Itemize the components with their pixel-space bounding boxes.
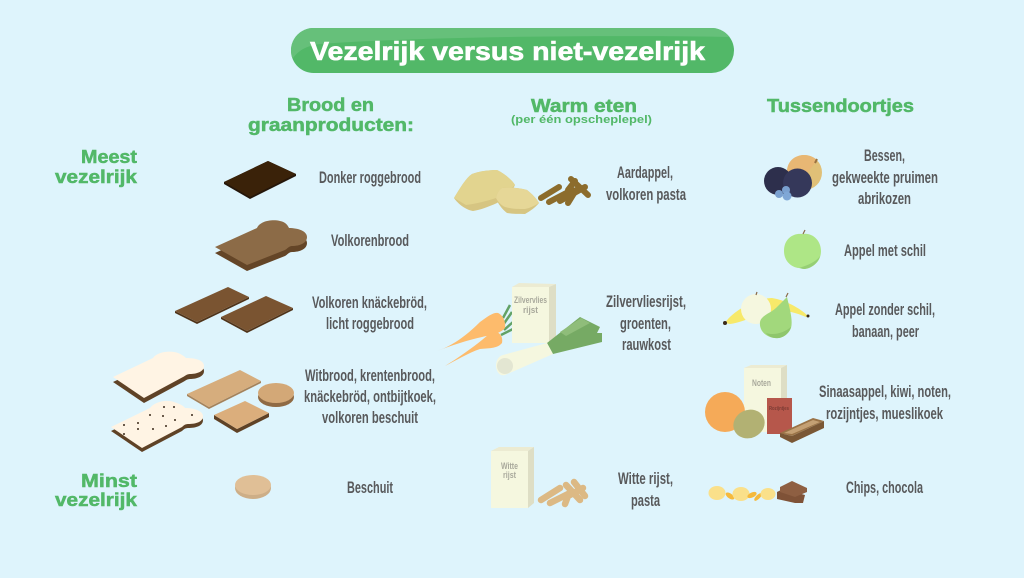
text: appel zonder schil, banaan, peer: banaan, peer <box>852 322 919 341</box>
title banner: Vezelrijk versus niet-vezelrijk <box>310 36 706 66</box>
text: zilvervliesrijst, groenten, rauwkost: rauwkost <box>622 335 671 354</box>
text: bessen, gekweekte pruimen, abrikozen: Bessen, <box>864 146 905 165</box>
label: minst vezelrijk <box>55 471 138 510</box>
heading: tussendoortjes: Tussendoortjes <box>767 96 914 116</box>
title banner <box>291 28 734 73</box>
heading: warm eten <box>511 96 652 126</box>
text: zilvervliesrijst, groenten, rauwkost: Zilvervliesrijst, <box>606 292 686 311</box>
icon: sinaasappel, kiwi, noten, rozijntjes, mueslikoek: Noten <box>752 378 771 388</box>
heading: warm eten: Warm eten <box>531 96 637 116</box>
text: witte rijst, pasta: Witte rijst, <box>618 469 673 488</box>
text: bessen, gekweekte pruimen, abrikozen: gekweekte pruimen <box>832 168 938 187</box>
icon: ontbijtkoek <box>214 401 269 433</box>
heading: brood en graanproducten <box>248 95 414 135</box>
icon: zilvervliesrijst, wortels en prei <box>437 283 602 375</box>
icon: chips en chocola <box>708 481 807 503</box>
label: minst vezelrijk: Minst <box>81 471 137 491</box>
icon: sinaasappel, kiwi, noten, rozijntjes, mueslikoek <box>705 365 824 443</box>
text: witte rijst, pasta: pasta <box>631 491 660 510</box>
text: appel zonder schil, banaan, peer: Appel zonder schil, <box>835 300 935 319</box>
icon: volkoren knäckebröd en licht roggebrood <box>175 287 293 333</box>
text: sinaasappel, kiwi, noten, rozijntjes, mueslikoek: Sinaasappel, kiwi, noten, <box>819 382 951 401</box>
heading: brood en graanproducten: graanproducten: <box>248 115 414 135</box>
text: donker roggebrood: Donker roggebrood <box>319 168 421 187</box>
icon: beschuit <box>235 475 271 499</box>
text: witbrood, krentenbrood, knäckebröd, ontbijtkoek, volkoren beschuit <box>304 366 436 427</box>
text: bessen, gekweekte pruimen, abrikozen <box>832 146 938 208</box>
text: volkorenbrood: Volkorenbrood <box>331 231 409 250</box>
icon: aardappel en volkoren pasta <box>454 170 588 214</box>
icon: witte rijst en pasta: Witte <box>501 461 518 471</box>
text: volkoren knäckebröd, licht roggebrood <box>312 293 427 333</box>
icon: sinaasappel, kiwi, noten, rozijntjes, mueslikoek: Rozijntjes <box>769 406 789 412</box>
text: sinaasappel, kiwi, noten, rozijntjes, mueslikoek: rozijntjes, mueslikoek <box>826 404 943 423</box>
text: bessen, gekweekte pruimen, abrikozen: abrikozen <box>858 189 911 208</box>
icon: witte rijst en pasta: rijst <box>503 470 516 480</box>
text: sinaasappel, kiwi, noten, rozijntjes, mueslikoek <box>819 382 951 423</box>
icon: zilvervliesrijst, wortels en prei: rijst <box>523 305 538 315</box>
icon: witbrood <box>113 352 204 403</box>
text: aardappel, volkoren pasta: Aardappel, <box>617 163 673 182</box>
label: minst vezelrijk: vezelrijk <box>55 490 138 510</box>
text: aardappel, volkoren pasta: volkoren pasta <box>606 185 686 204</box>
text: appel zonder schil, banaan, peer <box>835 300 935 341</box>
text: appel met schil: Appel met schil <box>844 241 926 260</box>
label: meest vezelrijk <box>55 147 138 187</box>
icon: volkorenbrood <box>215 220 307 271</box>
text: witbrood, krentenbrood, knäckebröd, ontbijtkoek, volkoren beschuit: Witbrood, krentenbrood, <box>305 366 435 385</box>
text: volkoren knäckebröd, licht roggebrood: licht roggebrood <box>326 314 414 333</box>
icon: appel met schil <box>784 230 821 269</box>
text: witbrood, krentenbrood, knäckebröd, ontbijtkoek, volkoren beschuit: volkoren beschuit <box>322 408 418 427</box>
heading: warm eten: (per één opscheplepel) <box>511 114 652 126</box>
icon: krentenbrood <box>111 401 203 452</box>
text: beschuit: Beschuit <box>347 478 393 497</box>
heading: brood en graanproducten: Brood en <box>287 95 374 115</box>
text: zilvervliesrijst, groenten, rauwkost: groenten, <box>620 314 671 333</box>
icon: witte rijst en pasta <box>491 447 585 508</box>
icon: donker roggebrood <box>224 161 296 199</box>
label: meest vezelrijk: Meest <box>81 147 137 167</box>
text: zilvervliesrijst, groenten, rauwkost <box>606 292 686 354</box>
icon: licht knäckebröd <box>187 370 261 409</box>
text: volkoren knäckebröd, licht roggebrood: Volkoren knäckebröd, <box>312 293 427 312</box>
icon: zilvervliesrijst, wortels en prei: Zilvervlies <box>514 295 547 305</box>
icon: bessen, pruimen, abrikoos <box>764 155 822 200</box>
icon: volkoren beschuit <box>258 383 294 407</box>
label: meest vezelrijk: vezelrijk <box>55 167 138 187</box>
text: witbrood, krentenbrood, knäckebröd, ontbijtkoek, volkoren beschuit: knäckebröd, ontbijtkoek, <box>304 387 436 406</box>
text: witte rijst, pasta <box>618 469 673 510</box>
text: aardappel, volkoren pasta <box>606 163 686 204</box>
icon: appel, banaan, peer <box>723 292 810 338</box>
text: chips, chocola: Chips, chocola <box>846 478 923 497</box>
